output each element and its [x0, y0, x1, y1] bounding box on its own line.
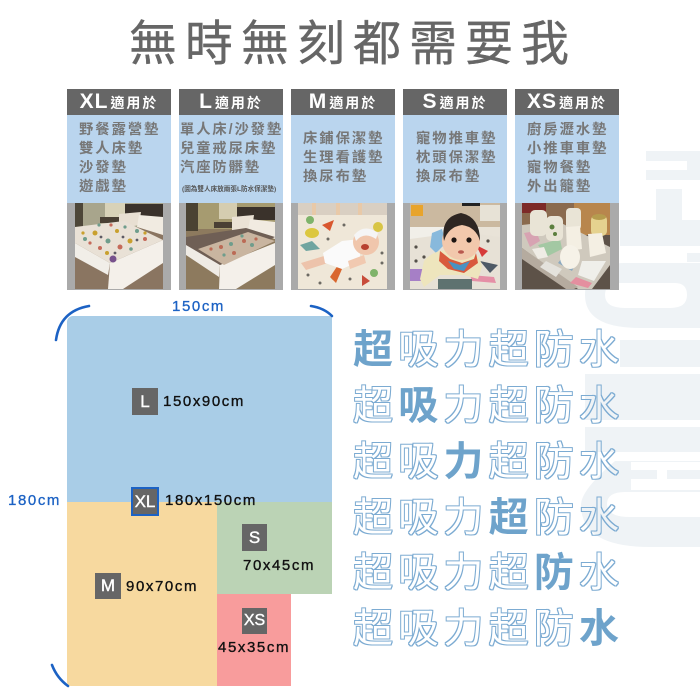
- L zone: [67, 316, 332, 502]
- XS zone: [217, 594, 291, 686]
- panel: S card: [403, 89, 507, 290]
- XL heading: [67, 89, 171, 115]
- slogan row 4: 超吸力: [353, 496, 489, 540]
- L uses: 單人床/沙發墊: [180, 122, 283, 138]
- M heading: [291, 89, 395, 115]
- XL uses: [67, 115, 171, 203]
- L heading: L適用於: [199, 90, 263, 113]
- slogan row 4: 超: [489, 496, 534, 540]
- M uses: 生理看護墊: [303, 150, 384, 166]
- M photo: baby on mat: [298, 203, 387, 289]
- width label: 150cm: [172, 298, 225, 315]
- L size: 150x90cm: [163, 393, 245, 410]
- L uses: 兒童戒尿床墊: [180, 141, 277, 157]
- L badge: L: [140, 392, 150, 411]
- M size: 90x70cm: [126, 578, 198, 595]
- M zone: [67, 502, 217, 686]
- slogan row 4: 防水: [534, 496, 624, 540]
- XS badge: XS: [244, 612, 265, 629]
- slogan row 5: 超吸力超: [353, 551, 534, 595]
- S photo: baby with bib: [410, 203, 500, 289]
- XS uses: 寵物餐墊: [527, 160, 592, 176]
- panel: M card: [291, 89, 395, 290]
- slogan row 3: 力: [443, 440, 489, 484]
- S badge: [242, 524, 267, 551]
- M uses: 換尿布墊: [303, 169, 368, 185]
- XS uses: 外出籠墊: [527, 179, 592, 195]
- slogan row 2: 超: [353, 384, 398, 428]
- panel: XS card: [515, 89, 619, 290]
- XL heading: XL適用於: [80, 90, 158, 113]
- title: 無時無刻都需要我: [129, 18, 577, 71]
- XS heading: XS適用於: [527, 90, 607, 113]
- XL badge: XL: [135, 492, 155, 511]
- XL uses: 野餐露營墊: [79, 122, 160, 138]
- S zone: [217, 502, 332, 594]
- S uses: 寵物推車墊: [416, 131, 497, 147]
- slogan row 3: [353, 440, 624, 484]
- slogan row 6: 水: [579, 607, 624, 651]
- slogan row 2: 吸: [398, 384, 443, 428]
- XS photo: cups on mat: [522, 203, 610, 289]
- slogan row 5: [353, 551, 624, 595]
- XS uses: 小推車車墊: [527, 141, 608, 157]
- L note: (圖為雙人床放兩張L防水保潔墊): [182, 186, 276, 193]
- panel: L card: [179, 89, 283, 290]
- XS uses: [515, 115, 619, 203]
- slogan row 3: 超吸: [353, 440, 443, 484]
- XL uses: 雙人床墊: [79, 141, 144, 157]
- slogan row 2: [353, 384, 624, 428]
- XS uses: 廚房瀝水墊: [527, 122, 608, 138]
- L uses: 汽座防髒墊: [180, 160, 261, 176]
- L uses: [179, 115, 283, 203]
- M uses: [291, 115, 395, 203]
- S badge: S: [249, 528, 260, 547]
- M heading: M適用於: [309, 90, 377, 113]
- panel: XL card: [67, 89, 171, 290]
- XS heading: [515, 89, 619, 115]
- S uses: 換尿布墊: [416, 169, 481, 185]
- L badge: [132, 388, 158, 415]
- XL uses: 沙發墊: [79, 160, 128, 176]
- slogan row 5: 防: [534, 551, 579, 595]
- XS size: 45x35cm: [218, 639, 290, 656]
- slogan row 6: 超吸力超防: [353, 607, 579, 651]
- slogan row 1: 吸力超防水: [398, 328, 624, 372]
- M uses: 床鋪保潔墊: [303, 131, 384, 147]
- slogan row 3: 超防水: [489, 440, 624, 484]
- slogan row 1: 超: [353, 328, 398, 372]
- S uses: 枕頭保潔墊: [416, 150, 497, 166]
- XS badge: [242, 608, 267, 634]
- slogan row 4: [353, 496, 624, 540]
- chart: size comparison diagram: [8, 298, 334, 688]
- XL badge: [131, 487, 159, 516]
- L photo: bed with two mats: [186, 203, 275, 289]
- S heading: [403, 89, 507, 115]
- dimension arcs: [50, 304, 334, 688]
- M badge: [95, 573, 121, 599]
- slogan row 5: 水: [579, 551, 624, 595]
- XL photo: bed with quilt: [75, 203, 163, 289]
- background watermark lettering: [581, 151, 700, 547]
- XL uses: 遊戲墊: [79, 179, 128, 195]
- L heading: [179, 89, 283, 115]
- M badge: M: [101, 576, 115, 595]
- S size: 70x45cm: [243, 557, 315, 574]
- S uses: [403, 115, 507, 203]
- slogan row 2: 力超防水: [443, 384, 624, 428]
- height label: 180cm: [8, 492, 61, 509]
- XL size: 180x150cm: [165, 492, 257, 509]
- S heading: S適用於: [422, 90, 488, 113]
